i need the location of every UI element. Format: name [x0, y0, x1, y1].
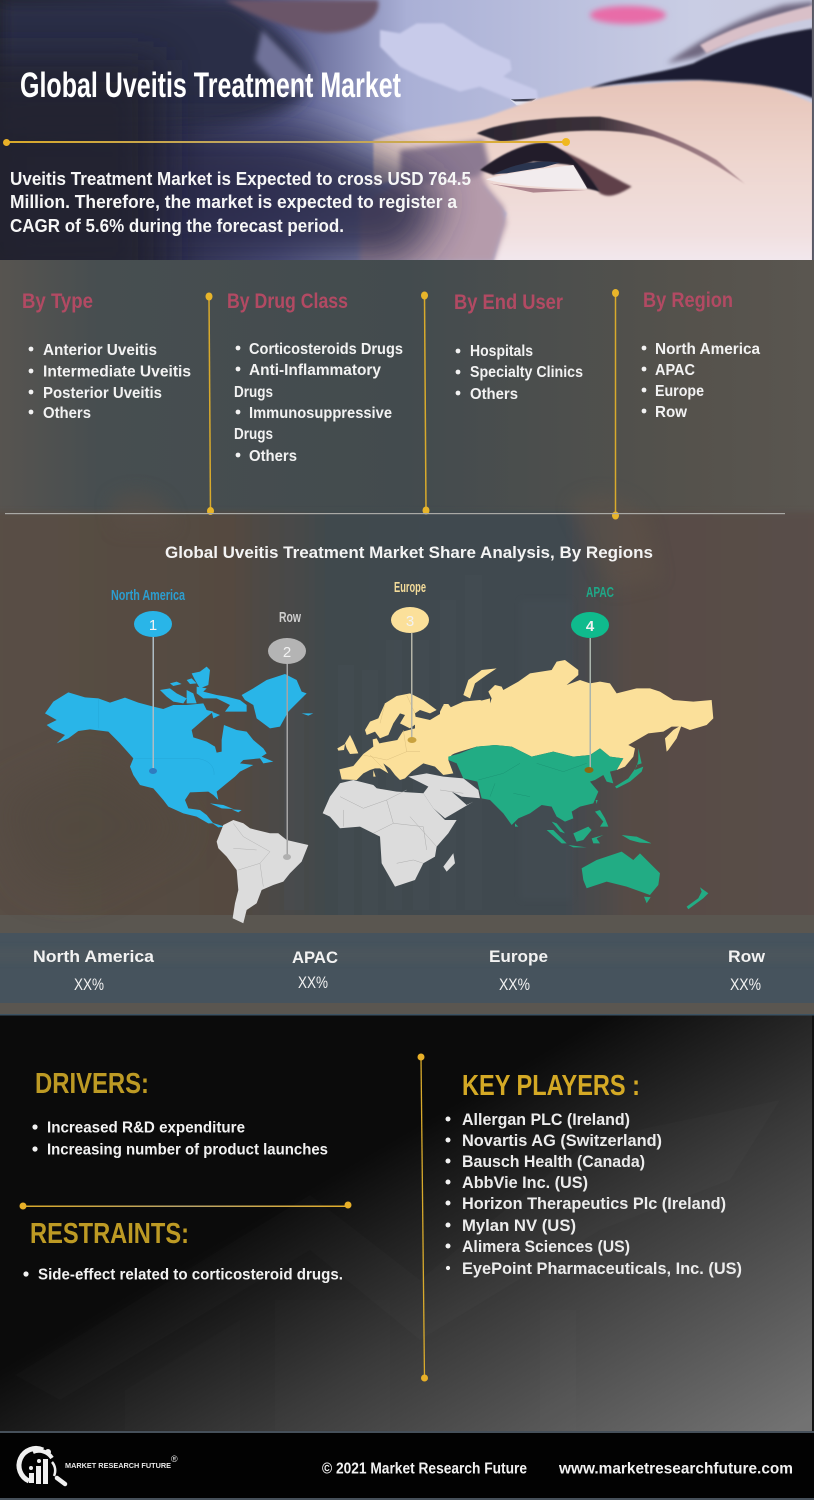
column: By End User: Specialty Clinics — [470, 364, 583, 381]
column: By End User: Others — [470, 386, 518, 403]
share: Europe — [489, 947, 548, 994]
column: By Region: Europe — [655, 383, 704, 400]
column: By Type: Others — [43, 405, 91, 422]
region: APAC — [448, 745, 708, 909]
key players block: Alimera Sciences (US) — [462, 1238, 630, 1256]
restraints block: Side-effect related to corticosteroid drugs. — [38, 1266, 343, 1284]
drivers block: Increasing number of product launches — [47, 1142, 328, 1158]
column: By Type: Intermediate Uveitis — [43, 364, 191, 380]
column: By Type: Posterior Uveitis — [43, 385, 162, 402]
drivers block: DRIVERS: — [35, 1068, 149, 1100]
hero divider line with dots — [3, 138, 570, 146]
footer bar — [0, 1431, 814, 1500]
key players block: Mylan NV (US) — [462, 1217, 576, 1235]
logo text: MARKET RESEARCH FUTURE — [65, 1461, 171, 1470]
region: Row (South America, Africa, Middle East) — [217, 773, 480, 923]
pin 1: North America — [111, 587, 185, 774]
column separators — [206, 289, 619, 520]
share: Europe: XX% — [499, 975, 530, 994]
pin 4: APAC — [571, 584, 614, 773]
copyright: © 2021 Market Research Future — [322, 1460, 527, 1478]
segmentation columns — [22, 289, 760, 465]
market summary text — [10, 169, 471, 236]
column: By Drug Class: Drugs — [234, 384, 273, 401]
drivers block: Increased R&D expenditure — [47, 1120, 245, 1136]
column: By End User: Hospitals — [470, 343, 533, 360]
column: By Drug Class: Others — [249, 448, 297, 465]
pin 3: Europe: Europe — [394, 579, 426, 596]
drivers block — [32, 1068, 328, 1158]
key players block: Bausch Health (Canada) — [462, 1153, 645, 1171]
registered mark: ® — [171, 1454, 178, 1464]
key players block: AbbVie Inc. (US) — [462, 1174, 588, 1192]
share: Europe: Europe — [489, 947, 548, 966]
share: APAC: XX% — [298, 973, 328, 992]
pin 2: Row: Row — [279, 609, 301, 626]
share: North America: North America — [33, 947, 155, 966]
column: By End User: By End User — [454, 291, 563, 314]
share: Row: Row — [728, 947, 766, 966]
pin 4: APAC: APAC — [586, 584, 614, 601]
hero photo: eye drops being applied — [0, 0, 814, 260]
column: By Drug Class: Corticosteroids Drugs — [249, 341, 403, 358]
pin 3: Europe — [391, 579, 429, 743]
column: By Region — [642, 289, 760, 421]
share: North America — [33, 947, 155, 994]
column: By Drug Class: By Drug Class — [227, 290, 348, 313]
column: By Drug Class — [227, 290, 403, 465]
share: North America: XX% — [74, 975, 104, 994]
website: www.marketresearchfuture.com — [558, 1460, 793, 1478]
column: By Region: APAC — [655, 362, 695, 379]
column: By Region: North America — [655, 341, 760, 358]
region: North America — [45, 667, 313, 827]
map heading: Global Uveitis Treatment Market Share Analysis, By Regions — [165, 543, 653, 562]
market summary text: Uveitis Treatment Market is Expected to cross USD 764.5 — [10, 169, 471, 189]
pin 4: APAC: 4 — [586, 618, 595, 635]
share: Row: XX% — [730, 975, 761, 994]
center vertical divider — [418, 1054, 428, 1382]
key players block: Allergan PLC (Ireland) — [462, 1111, 630, 1129]
pin 1: North America: 1 — [149, 617, 157, 634]
pin 3: Europe: 3 — [406, 613, 414, 630]
column: By End User — [454, 291, 583, 403]
column: By Type: Anterior Uveitis — [43, 342, 157, 359]
share: APAC — [292, 948, 338, 992]
segmentation and map panel background — [0, 260, 814, 1015]
market summary text: CAGR of 5.6% during the forecast period. — [10, 216, 344, 236]
key players block: EyePoint Pharmaceuticals, Inc. (US) — [462, 1260, 742, 1278]
column: By Type — [22, 290, 191, 422]
share: APAC: APAC — [292, 948, 338, 967]
column: By Region: By Region — [643, 289, 733, 312]
title: Global Uveitis Treatment Market — [20, 66, 401, 105]
column: By Drug Class: Anti-Inflammatory — [249, 362, 381, 379]
column: By Drug Class: Drugs — [234, 426, 273, 443]
column: By Type: By Type — [22, 290, 93, 313]
share: Row — [728, 947, 766, 994]
key players block — [446, 1070, 742, 1278]
regional share band — [0, 933, 814, 1003]
key players block: KEY PLAYERS : — [462, 1070, 640, 1102]
pin 1: North America: North America — [111, 587, 185, 604]
pin 2: Row: 2 — [283, 644, 291, 661]
market summary text: Million. Therefore, the market is expected to register a — [10, 192, 458, 212]
pin 2: Row — [268, 609, 306, 860]
lower panel background — [0, 1014, 814, 1431]
region: Europe and Russia — [337, 660, 713, 780]
key players block: Horizon Therapeutics Plc (Ireland) — [462, 1195, 726, 1213]
world map — [45, 660, 713, 923]
column: By Region: Row — [655, 404, 688, 421]
key players block: Novartis AG (Switzerland) — [462, 1132, 662, 1150]
restraints block — [23, 1218, 343, 1284]
column: By Drug Class: Immunosuppressive — [249, 405, 392, 422]
icon: Market Research Future logo — [19, 1448, 65, 1484]
drivers/restraints divider — [20, 1202, 352, 1210]
restraints block: RESTRAINTS: — [30, 1218, 189, 1250]
